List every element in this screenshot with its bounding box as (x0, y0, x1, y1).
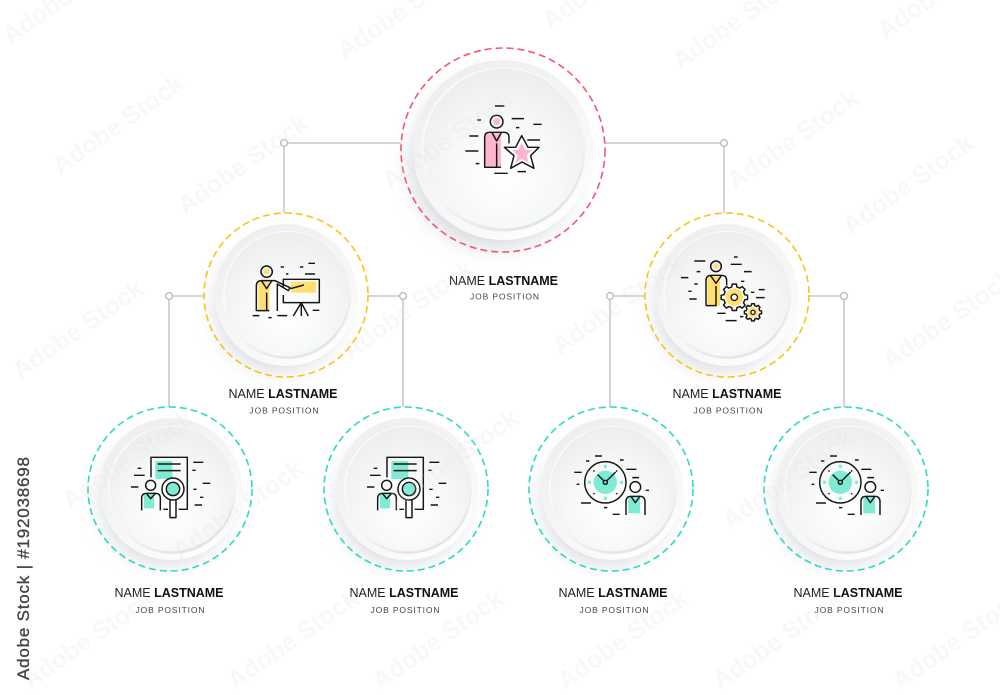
label: bottom node 2: JOB POSITION (370, 605, 440, 615)
label: middle right node: NAME LASTNAME (672, 387, 782, 401)
label: bottom node 1: NAME LASTNAME (114, 586, 224, 600)
icon: clock with person 1 (574, 456, 649, 515)
watermark pattern: Adobe Stock (337, 254, 479, 365)
watermark pattern: Adobe Stock (167, 454, 309, 565)
icon: presenter at board (253, 263, 319, 318)
panel: bottom node circle 3 (529, 407, 693, 571)
label: top node: JOB POSITION (470, 292, 539, 302)
connector lines (166, 140, 847, 407)
stock id side text: Adobe Stock | #192038698 (14, 457, 33, 680)
label: bottom node 1: JOB POSITION (136, 605, 204, 615)
icon: person with document and magnifier 2 (367, 457, 446, 518)
watermark pattern: Adobe Stock (722, 84, 864, 195)
panel: middle right node circle (645, 213, 809, 377)
watermark pattern: Adobe Stock (837, 129, 979, 240)
label: middle left node: NAME LASTNAME (228, 387, 338, 401)
label: top node (449, 274, 558, 302)
label: middle right node: JOB POSITION (694, 406, 762, 416)
label: bottom node 4: NAME LASTNAME (794, 586, 902, 600)
watermark pattern: Adobe Stock (377, 84, 519, 195)
panel: bottom node circle 4 (764, 407, 928, 571)
label: middle left node: JOB POSITION (250, 406, 318, 416)
label: middle right node (672, 387, 782, 416)
panel: top node circle (401, 48, 605, 252)
icon: person with star (465, 106, 542, 173)
label: bottom node 4: JOB POSITION (814, 605, 884, 615)
label: bottom node 2 (350, 586, 458, 615)
icon: clock with person 2 (809, 456, 884, 515)
label: middle left node (228, 387, 338, 416)
panel: bottom node circle 1 (88, 407, 252, 571)
watermark pattern: Adobe Stock (547, 249, 689, 360)
watermark pattern: Adobe Stock (47, 69, 189, 180)
label: top node: NAME LASTNAME (449, 274, 558, 288)
watermark pattern: Adobe Stock (57, 404, 199, 515)
watermark pattern: Adobe Stock (707, 584, 849, 695)
watermark pattern: Adobe Stock (17, 584, 159, 695)
watermark pattern: Adobe Stock (172, 109, 314, 220)
watermark pattern: Adobe Stock (717, 424, 859, 535)
icon: person with document and magnifier 1 (131, 457, 210, 518)
icon: person with gears (681, 257, 765, 321)
watermark pattern: Adobe Stock (382, 404, 524, 515)
watermark pattern: Adobe Stock (222, 584, 364, 695)
label: bottom node 4 (794, 586, 902, 615)
panel: middle left node circle (204, 213, 368, 377)
watermark pattern: Adobe Stock (367, 584, 509, 695)
label: bottom node 3 (558, 586, 668, 615)
watermark pattern: Adobe Stock (7, 274, 149, 385)
label: bottom node 3: NAME LASTNAME (558, 586, 668, 600)
watermark pattern: Adobe Stock (552, 584, 694, 695)
label: bottom node 2: NAME LASTNAME (350, 586, 458, 600)
panel: bottom node circle 2 (324, 407, 488, 571)
label: bottom node 3: JOB POSITION (580, 605, 648, 615)
label: bottom node 1 (114, 586, 224, 615)
